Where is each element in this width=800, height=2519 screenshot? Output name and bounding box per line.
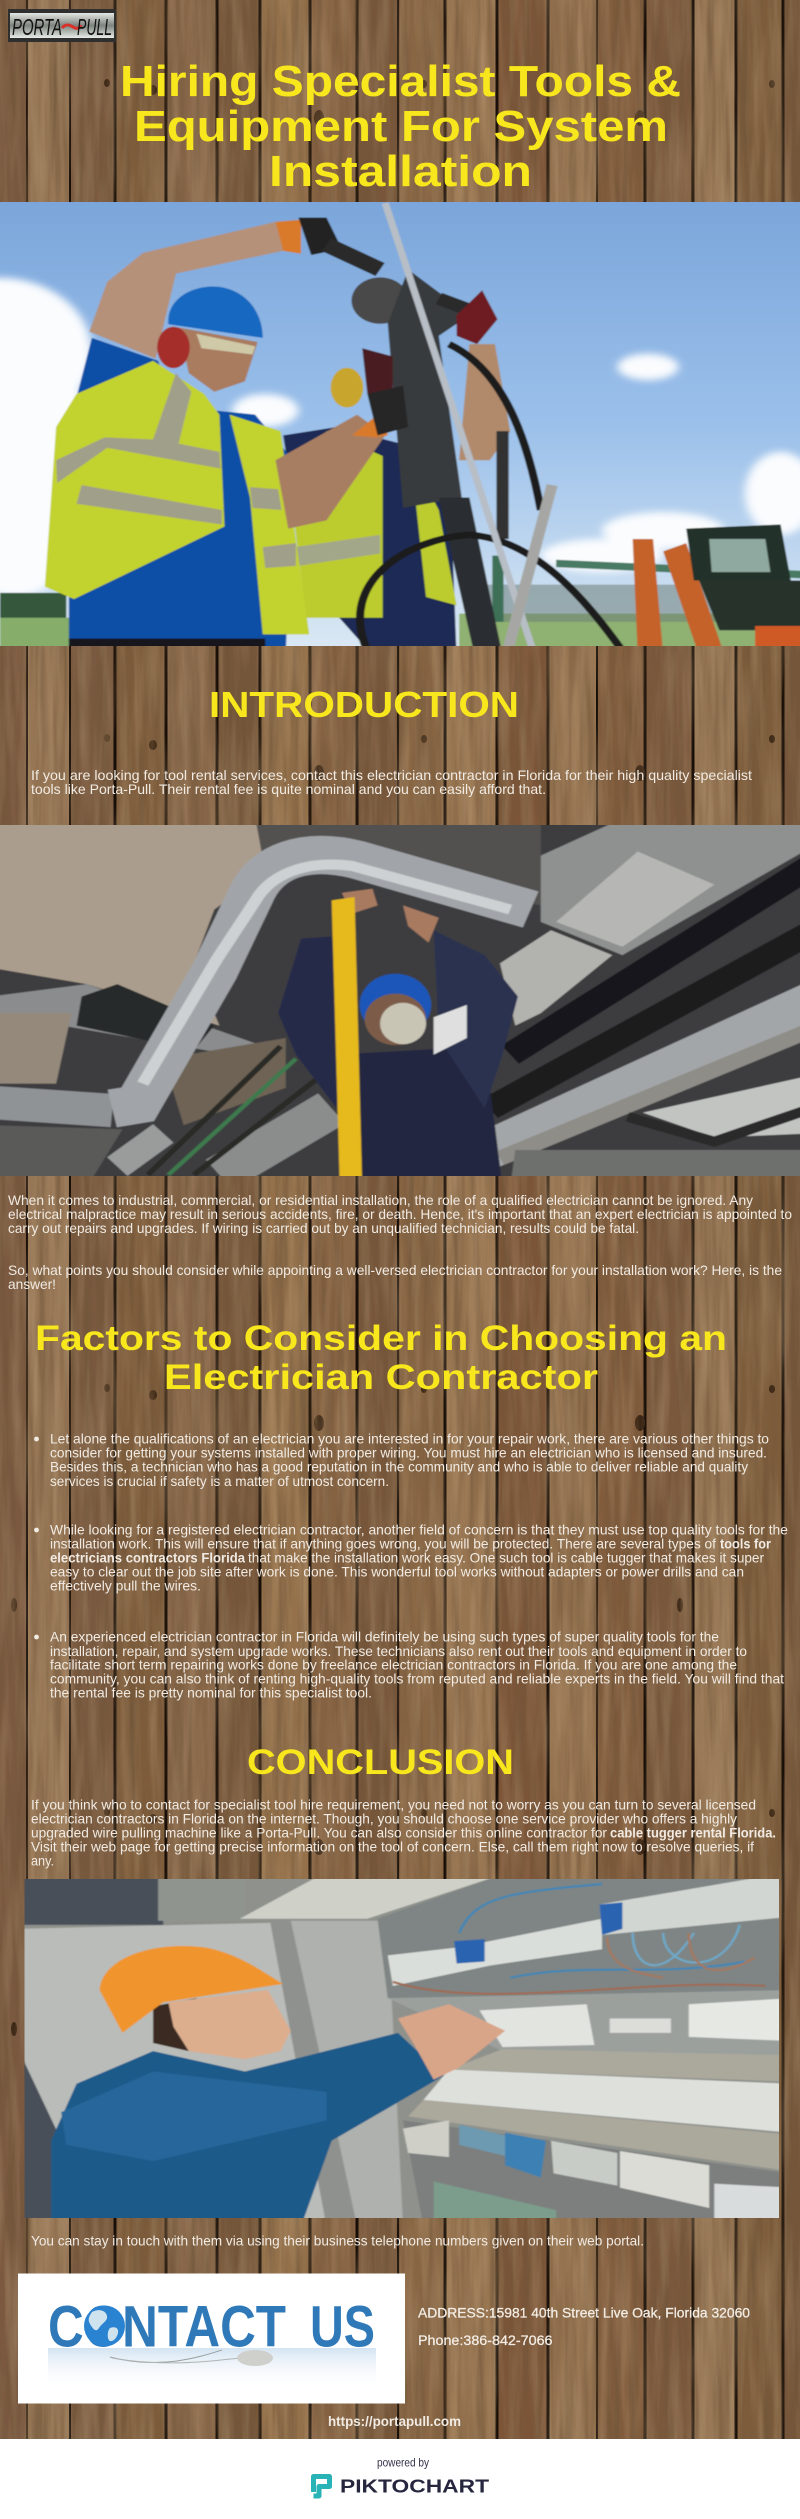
footer: piktochart credit <box>314 2456 489 2496</box>
text block: electrician role: So, what points you should consider while appointing a well-versed electrician contractor for your installation work? Here, is the <box>8 1263 782 1278</box>
bullet 3: community, you can also think of renting high-quality tools from reputed and reliable experts in the field. You will find that <box>50 1672 784 1686</box>
icon: mouse <box>110 2350 273 2366</box>
text block: electrician role: carry out repairs and upgrades. If wiring is carried out by an unqualified technician, results could be fatal. <box>8 1221 639 1236</box>
heading: factors: Electrician Contractor <box>164 1358 598 1397</box>
bullet 3 <box>34 1630 784 1701</box>
text block: conclusion: If you think who to contact for specialist tool hire requirement, you need not to worry as you can turn to several licensed <box>31 1798 756 1813</box>
title: Installation <box>269 147 532 196</box>
text block: stay in touch: You can stay in touch with them via using their business telephone numbers given on their web portal. <box>31 2234 644 2248</box>
sub-element: pulling tool and hoses <box>327 203 622 655</box>
text block: conclusion <box>31 1798 776 1869</box>
bullet 2 <box>34 1522 788 1594</box>
bullet 1: services is crucial if safety is a matter of utmost concern. <box>50 1474 389 1489</box>
title: Equipment For System <box>134 102 668 151</box>
image: contact us banner: US <box>310 2294 375 2360</box>
footer: piktochart credit: PIKTOCHART <box>340 2476 489 2496</box>
bullet 2: that make the installation work easy. One such tool is cable tugger that makes it super <box>248 1550 764 1566</box>
text block: address and phone: ADDRESS:15981 40th Street Live Oak, Florida 32060 <box>418 2306 750 2320</box>
heading: introduction: INTRODUCTION <box>209 684 519 725</box>
footer: piktochart credit: powered by <box>377 2456 429 2470</box>
photo: electrician at ceiling ducts <box>0 814 800 1187</box>
image: contact us banner: CONTACT <box>48 2294 286 2360</box>
heading: factors <box>35 1319 727 1397</box>
bullet 3: An experienced electrician contractor in Florida will definitely be using such types of super quality tools for the <box>50 1630 719 1644</box>
text block: conclusion: upgraded wire pulling machine like a Porta-Pull. You can also consider this online contractor for <box>31 1826 607 1841</box>
photo: workers with drilling tool <box>0 195 800 655</box>
sub-element: worker <box>278 889 518 1187</box>
bullet 3: installation, repair, and system upgrade works. These technicians also rent out their tools and equipment in order to <box>50 1644 747 1659</box>
bullet 1: consider for getting your systems installed with proper wiring. You must hire an electrician who is licensed and insured. <box>50 1446 767 1461</box>
text block: introduction: If you are looking for tool rental services, contact this electrician contractor in Florida for their high quality specialist <box>31 768 752 783</box>
bullet 2: tools for <box>720 1537 772 1552</box>
bullet 3: facilitate short term repairing works done by freelance electrician contractors in Florida. If you are one among the <box>50 1658 737 1673</box>
text block: conclusion: electrician contractors in Florida on the internet. Though, you should choose one service provider who offers a highly <box>31 1812 737 1826</box>
sub-element: silver duct <box>0 855 531 1111</box>
image: contact us banner <box>18 2274 405 2404</box>
bullet 2: While looking for a registered electrician contractor, another field of concern is that they must use top quality tools for the <box>50 1522 788 1538</box>
sub-element: wiring and breakers <box>378 1872 791 2226</box>
title <box>120 57 681 196</box>
bullet 2: installation work. This will ensure that if anything goes wrong, you will be protected. There are several types of <box>50 1537 716 1552</box>
text block: conclusion: any. <box>31 1854 54 1869</box>
icon: Porta-Pull logo: PULL <box>77 14 112 40</box>
text block: electrician role: answer! <box>8 1277 56 1292</box>
bullet 2: effectively pull the wires. <box>50 1579 201 1594</box>
text block: conclusion: Visit their web page for getting precise information on the tool of concern. Else, call them right now to resolve queries, if <box>31 1840 754 1854</box>
text block: address and phone: Phone:386-842-7066 <box>418 2333 552 2348</box>
photo: electrician at switchboard <box>15 1872 791 2226</box>
bullet 2: easy to clear out the job site after work is done. This wonderful tool works without adapters or power drills and can <box>50 1565 744 1580</box>
text block: introduction: tools like Porta-Pull. Their rental fee is quite nominal and you can easily afford that. <box>31 782 546 797</box>
sub-element: electrician <box>51 1946 505 2226</box>
heading: factors: Factors to Consider in Choosing an <box>35 1319 727 1358</box>
text: website link: https://portapull.com <box>328 2414 461 2429</box>
text block: address and phone <box>418 2306 750 2348</box>
icon: Porta-Pull logo: PORTA <box>12 14 62 40</box>
text block: introduction <box>31 768 752 797</box>
sub-element: rear worker <box>283 344 510 655</box>
bullet list: factors <box>34 1432 788 1701</box>
text block: electrician role: electrical malpractice may result in serious accidents, fire, or death. Hence, it's important that an expert electrician is appointed to <box>8 1207 792 1222</box>
bullet 1 <box>34 1432 769 1489</box>
text block: electrician role <box>8 1193 792 1292</box>
bullet 1: Besides this, a technician who has a good reputation in the community and who is able to deliver reliable and quality <box>50 1460 748 1475</box>
icon: piktochart mark <box>314 2476 330 2496</box>
bullet 3: the rental fee is pretty nominal for this specialist tool. <box>50 1686 372 1701</box>
text block: conclusion: cable tugger rental Florida. <box>610 1826 776 1841</box>
bullet 1: Let alone the qualifications of an electrician you are interested in for your repair work, there are various other things to <box>50 1432 769 1446</box>
heading: conclusion: CONCLUSION <box>247 1743 514 1782</box>
title: Hiring Specialist Tools & <box>120 57 681 106</box>
icon: Porta-Pull logo <box>8 9 116 42</box>
icon: globe <box>84 2306 125 2346</box>
text block: electrician role: When it comes to industrial, commercial, or residential installation, the role of a qualified electrician cannot be ignored. Any <box>8 1193 753 1208</box>
bullet 2: electricians contractors Florida <box>50 1550 245 1566</box>
sub-element: front worker <box>45 218 388 655</box>
